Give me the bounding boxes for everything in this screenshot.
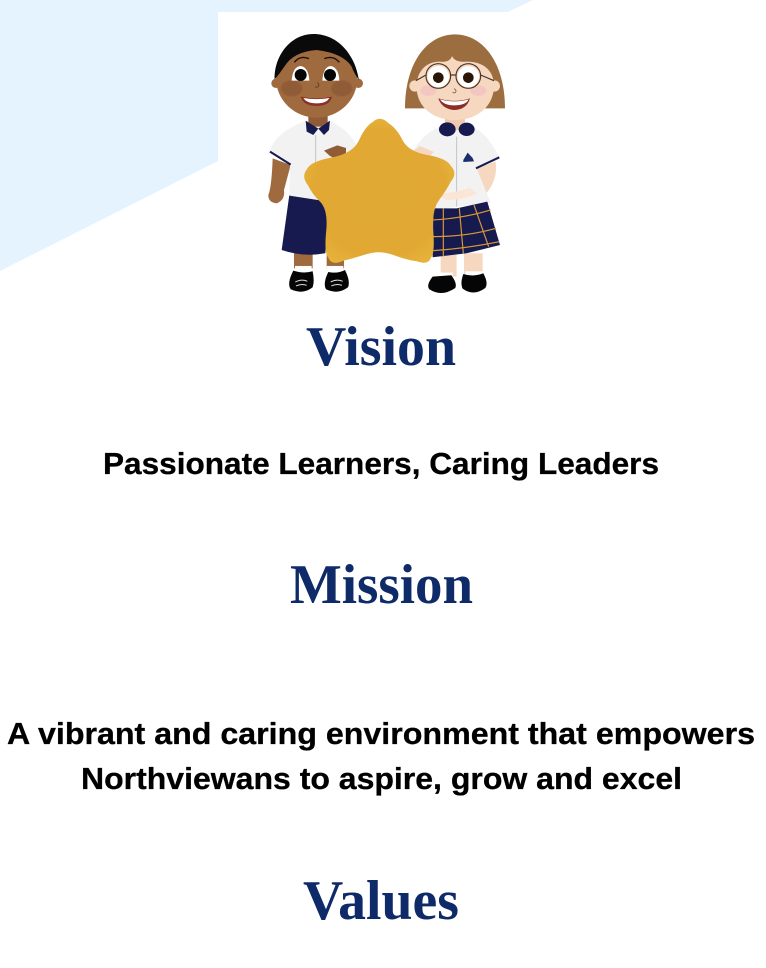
boy nose bbox=[315, 83, 319, 87]
heading: Vision: Vision bbox=[306, 316, 456, 378]
boy eyebrows bbox=[294, 57, 339, 62]
mission statement: A vibrant and caring environment that empowers bbox=[7, 716, 755, 751]
girl face bbox=[417, 56, 494, 120]
boy arm bbox=[268, 158, 291, 203]
boy neck bbox=[308, 113, 328, 127]
boy hair bbox=[275, 34, 359, 80]
vision statement: Passionate Learners, Caring Leaders bbox=[103, 446, 659, 481]
girl neck bbox=[445, 115, 465, 130]
heading: Mission: Mission bbox=[290, 554, 473, 616]
illustration: two students holding a star bbox=[268, 34, 505, 293]
heading: Values: Values bbox=[303, 870, 459, 932]
boy mouth bbox=[301, 97, 332, 106]
mission statement bbox=[7, 716, 755, 796]
girl hair bbox=[405, 34, 505, 108]
girl collar bbox=[439, 122, 475, 136]
golden star bbox=[304, 119, 454, 263]
girl hand on star bbox=[413, 146, 434, 161]
girl socks bbox=[434, 271, 483, 279]
girl shirt bbox=[413, 127, 499, 210]
boy shorts bbox=[282, 195, 330, 255]
girl student bbox=[405, 34, 505, 293]
girl skirt bbox=[433, 202, 500, 257]
boy shirt bbox=[269, 121, 356, 202]
girl mouth bbox=[438, 98, 470, 110]
girl glasses bbox=[416, 64, 494, 88]
girl arm bbox=[463, 162, 496, 198]
boy head bbox=[276, 39, 357, 118]
girl skirt checks bbox=[433, 205, 499, 257]
girl ears bbox=[409, 80, 500, 92]
boy ears bbox=[271, 79, 363, 88]
pale blue background shape bbox=[0, 0, 533, 271]
school logo bbox=[463, 153, 474, 162]
girl cheeks bbox=[420, 85, 486, 96]
boy shirt placket bbox=[314, 135, 317, 193]
girl nose bbox=[453, 89, 456, 93]
boy cheeks bbox=[281, 80, 352, 96]
girl legs bbox=[441, 253, 483, 277]
boy legs bbox=[294, 252, 344, 268]
boy eyes bbox=[292, 66, 339, 81]
boy shoes bbox=[289, 270, 349, 292]
girl shoes bbox=[428, 273, 487, 293]
girl shirt placket bbox=[455, 137, 458, 207]
boy collar bbox=[306, 121, 330, 135]
girl open hand bbox=[439, 188, 477, 200]
boy sleeve trim bbox=[270, 152, 291, 165]
mission statement: Northviewans to aspire, grow and excel bbox=[81, 761, 682, 796]
girl sleeve trim bbox=[476, 157, 499, 168]
boy hand bbox=[324, 145, 346, 161]
boy socks bbox=[295, 266, 343, 274]
boy student bbox=[268, 34, 363, 292]
girl eyes bbox=[428, 66, 479, 87]
